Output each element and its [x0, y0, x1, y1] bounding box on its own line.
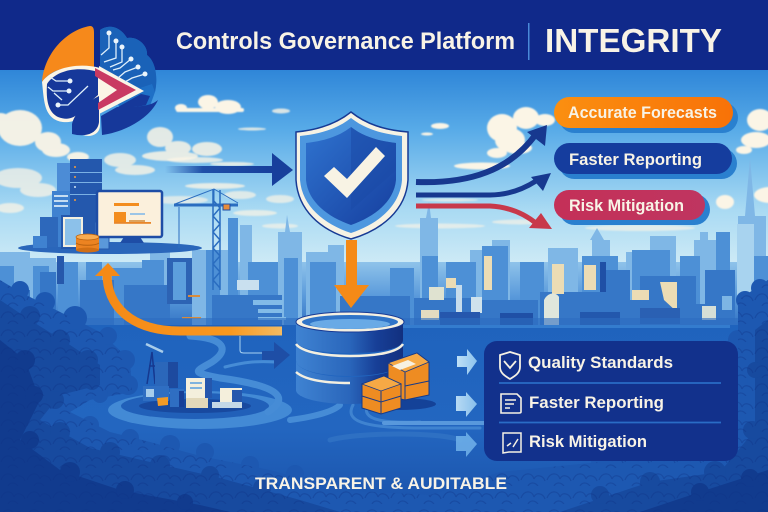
pill: faster reporting: [554, 143, 737, 179]
tagline: TRANSPARENT & AUDITABLE: [255, 474, 507, 493]
shield with check mark: [296, 112, 408, 239]
arrow: sources to shield: [165, 153, 293, 186]
brand name: INTEGRITY: [545, 22, 722, 59]
monitor: [97, 191, 162, 243]
distant city skyline: [0, 158, 766, 332]
horizon line: [340, 325, 730, 328]
risk mitigation label: Risk Mitigation: [529, 432, 647, 451]
front city buildings: [0, 270, 735, 332]
field office buildings: [139, 344, 251, 413]
outcome arrows: [416, 125, 552, 229]
tower mast: [147, 352, 155, 384]
pale arrows to checklist: [456, 349, 477, 457]
logo: brain with play arrow: [42, 26, 158, 136]
small document panel: [62, 216, 84, 248]
quality standards label: Quality Standards: [528, 353, 673, 372]
orange feedback arrow: [95, 263, 282, 331]
orange down arrow: [334, 240, 369, 308]
divider lines: [499, 383, 721, 422]
cream outline of left lobe: [42, 66, 100, 136]
header bar: [0, 0, 768, 70]
connector line to database: [240, 336, 272, 353]
database cylinder: [296, 312, 404, 404]
navy lower lobe: [72, 96, 99, 135]
city haze: [0, 262, 768, 330]
pill: faster reporting: Faster Reporting: [569, 150, 702, 169]
header divider: [528, 23, 530, 60]
mid-ground city buildings: [0, 218, 768, 332]
highlighted city buildings: [0, 224, 768, 328]
construction crane: [174, 189, 238, 290]
orange hemisphere: [42, 26, 94, 82]
magenta chevron: [95, 68, 136, 110]
icon: report document: [501, 394, 521, 413]
ground plain: [0, 325, 768, 512]
server tower: [33, 159, 102, 248]
title: Controls Governance Platform: [176, 28, 515, 55]
pill: risk mitigation: Risk Mitigation: [569, 196, 684, 215]
source systems: servers and monitor: [18, 159, 202, 254]
circuit nodes: [56, 30, 148, 108]
pill: risk mitigation: [554, 190, 710, 225]
blue swoosh: [101, 100, 158, 135]
clouds: [0, 95, 768, 231]
panel: quality checklist: [484, 341, 738, 461]
pill: accurate forecasts: Accurate Forecasts: [568, 103, 717, 122]
orange storage boxes: [362, 353, 436, 414]
orange database: [76, 234, 99, 252]
forest: lower left, bottom and right: [0, 279, 768, 512]
icon: quality shield: [500, 352, 520, 379]
circuit traces: [48, 33, 145, 105]
arrow into database: [262, 342, 290, 369]
sky background: [0, 70, 768, 270]
platform disc: [18, 242, 202, 254]
winding river and island ring: [108, 336, 484, 440]
pill: accurate forecasts: [554, 97, 738, 133]
icon: risk chart: [503, 433, 521, 453]
faster reporting label: Faster Reporting: [529, 393, 664, 412]
navy left lobe: [47, 69, 98, 119]
blue hemisphere lobes: [100, 27, 156, 108]
arrow outline: [99, 66, 144, 114]
